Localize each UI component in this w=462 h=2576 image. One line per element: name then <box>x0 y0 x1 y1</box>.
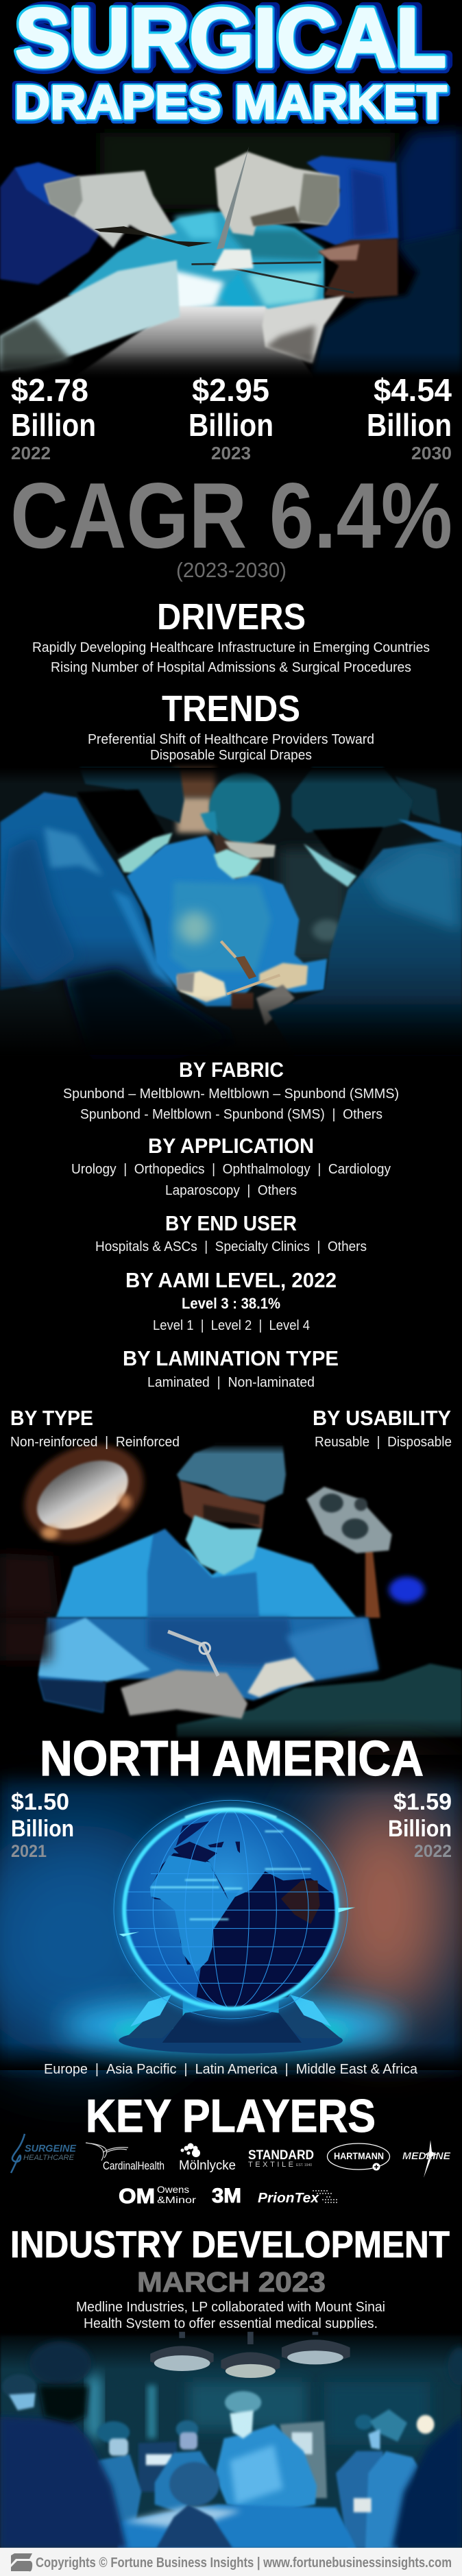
heading: North America: NORTH AMERICA <box>40 1731 424 1786</box>
logo: Cardinal Health <box>86 2143 165 2172</box>
logo: Owens and Minor: &Minor <box>157 2194 196 2205</box>
regional stat: 2021: $1.50 <box>11 1789 69 1815</box>
photo: surgical hands over drape <box>0 130 462 382</box>
CAGR callout: (2023-2030) <box>176 558 287 582</box>
trends section <box>88 688 374 763</box>
logo: Hartmann <box>328 2143 389 2170</box>
regional stat: 2022: 2022 <box>414 1842 452 1861</box>
title <box>12 0 450 131</box>
segment: by end user <box>95 1211 367 1254</box>
market stat: 2023: Billion <box>189 407 273 443</box>
trends section: Preferential Shift of Healthcare Providers Toward <box>88 732 374 747</box>
logo: PrionTex: PrionTex <box>258 2191 319 2206</box>
market stat: 2030: 2030 <box>411 443 452 463</box>
segment: by AAMI level <box>125 1268 337 1333</box>
segment: by AAMI level: Level 3 : 38.1% <box>182 1295 280 1312</box>
logo: Cardinal Health: CardinalHealth <box>103 2159 165 2172</box>
surgeon hands and drape <box>0 1618 462 1746</box>
market stat: 2023: $2.95 <box>192 372 269 408</box>
logo: Standard Textile: STANDARD <box>248 2148 314 2163</box>
globe backdrop <box>0 1755 462 2070</box>
logo: Surgeine Healthcare <box>11 2134 77 2173</box>
segment: by lamination type: Laminated | Non-laminated <box>147 1375 315 1390</box>
regional stat: 2022: Billion <box>388 1816 452 1842</box>
logo: Owens and Minor: OM <box>119 2184 155 2208</box>
drivers section <box>32 596 430 675</box>
market stat: 2022 <box>11 372 96 463</box>
logo: 3M: 3M <box>212 2185 241 2207</box>
team: right figures <box>336 2451 383 2549</box>
photo: surgeon with lamp <box>0 1425 462 1746</box>
regional stat: 2021 <box>11 1789 74 1861</box>
regional stat: 2021: Billion <box>11 1816 74 1842</box>
regions list: Europe | Asia Pacific | Latin America | Middle East & Africa <box>44 2062 418 2077</box>
equipment panel <box>365 1551 380 1618</box>
icon: glowing globe on stand <box>114 1800 355 2054</box>
market stat: 2022: Billion <box>11 407 96 443</box>
segment: by end user: BY END USER <box>165 1211 297 1235</box>
market stat: 2030: $4.54 <box>374 372 452 408</box>
heading: by type: BY TYPE <box>10 1406 93 1430</box>
gloves <box>44 171 177 248</box>
logo: Medline <box>402 2140 451 2178</box>
left surgeon head <box>80 768 184 823</box>
surgery lamp <box>0 1425 424 1618</box>
team: lead surgeon <box>215 2425 317 2514</box>
drivers section: Rapidly Developing Healthcare Infrastructure in Emerging Countries <box>32 640 430 655</box>
logo: Owens and Minor <box>119 2184 196 2208</box>
regional stat: 2021: 2021 <box>11 1842 47 1861</box>
segment: by AAMI level: BY AAMI LEVEL, 2022 <box>125 1268 337 1292</box>
market stat: 2030 <box>367 372 452 463</box>
segment: by application: Urology | Orthopedics | Ophthalmology | Cardiology <box>71 1162 391 1177</box>
logo: Standard Textile: EST. 1940 <box>296 2163 312 2167</box>
logo: Surgeine Healthcare: HEALTHCARE <box>23 2154 75 2162</box>
segment: by fabric: Spunbond - Meltblown - Spunbond (SMS) | Others <box>80 1107 382 1122</box>
segment: by application: Laparoscopy | Others <box>165 1183 297 1198</box>
heading: by usability: BY USABILITY <box>313 1406 451 1430</box>
segment: by lamination type: BY LAMINATION TYPE <box>123 1346 339 1370</box>
segment: by end user: Hospitals & ASCs | Specialty Clinics | Others <box>95 1239 367 1254</box>
heading: DRAPES MARKET: DRAPES MARKET <box>14 75 447 129</box>
belly fade <box>71 306 315 380</box>
right surgeon gown <box>268 838 462 1055</box>
drivers section: Rising Number of Hospital Admissions & Surgical Procedures <box>51 660 411 675</box>
logo: Medline: MEDLINE <box>402 2150 451 2162</box>
market stat: 2030: Billion <box>367 407 452 443</box>
segment: by fabric: BY FABRIC <box>179 1058 284 1082</box>
company logos <box>11 2134 451 2208</box>
logo: Standard Textile: TEXTILE <box>248 2161 293 2169</box>
base glow <box>60 1998 402 2053</box>
photo: operating room team <box>0 2329 462 2557</box>
logo: Surgeine Healthcare: SURGEINE <box>25 2143 77 2154</box>
logo: Molnlycke: Mölnlycke <box>179 2159 236 2173</box>
segment: by application <box>71 1134 391 1198</box>
heading: by usability: Reusable | Disposable <box>315 1435 452 1450</box>
center surgeon gown <box>127 836 327 1006</box>
heading: by usability <box>313 1406 452 1450</box>
segment: by application: BY APPLICATION <box>148 1134 314 1158</box>
regional stat: 2022: $1.59 <box>393 1789 452 1815</box>
heading: DRAPES MARKET: DRAPES MARKET <box>12 74 445 127</box>
heading: DRAPES MARKET: DRAPES MARKET <box>15 77 448 131</box>
logo: Molnlycke <box>179 2143 236 2173</box>
surgeon upper body <box>56 1444 356 1618</box>
market stat: 2023: 2023 <box>211 443 251 463</box>
heading: by type: Non-reinforced | Reinforced <box>10 1435 180 1450</box>
market stat: 2022: $2.78 <box>11 372 88 408</box>
right surgeon head <box>395 776 441 825</box>
left surgeon gown <box>0 792 236 1055</box>
development date: MARCH 2023 <box>137 2266 326 2298</box>
segment: by fabric: Spunbond – Meltblown- Meltblown – Spunbond (SMMS) <box>63 1086 399 1102</box>
regional stat: 2022 <box>388 1789 452 1861</box>
segment: by lamination type <box>123 1346 339 1390</box>
photo: surgical team of three <box>0 768 462 1055</box>
logo: Hartmann: HARTMANN <box>334 2151 384 2161</box>
heading: key players: KEY PLAYERS <box>86 2090 376 2142</box>
footer bar <box>0 2548 462 2576</box>
team: left figures <box>95 2454 141 2523</box>
stand <box>119 1995 343 2054</box>
market stat: 2023 <box>189 372 273 463</box>
table with drape <box>118 2505 356 2549</box>
gloves and instrument <box>177 971 227 1002</box>
development description: Health System to offer essential medical supplies. <box>84 2316 378 2331</box>
heading: DRAPES MARKET: DRAPES MARKET <box>14 75 447 129</box>
market stat: 2022: 2022 <box>11 443 51 463</box>
development description <box>76 2300 385 2331</box>
icon: Fortune Business Insights logo <box>11 2553 32 2571</box>
equipment <box>138 2442 177 2492</box>
foreground figures <box>156 2505 233 2549</box>
center surgeon head <box>212 833 265 879</box>
trends section: TRENDS <box>162 688 300 729</box>
drivers section: DRIVERS <box>157 596 306 637</box>
segment: by AAMI level: Level 1 | Level 2 | Level 4 <box>153 1318 310 1333</box>
development description: Medline Industries, LP collaborated with Mount Sinai <box>76 2300 385 2315</box>
logo: Owens and Minor: Owens <box>157 2184 189 2195</box>
sphere <box>114 1800 355 2019</box>
segment: by fabric <box>63 1058 399 1122</box>
ceiling lights <box>150 2332 350 2378</box>
drape <box>68 211 324 328</box>
instruments <box>217 147 249 250</box>
logo: Standard Textile <box>248 2148 314 2169</box>
trends section: Disposable Surgical Drapes <box>150 748 312 763</box>
heading: by type <box>10 1406 180 1450</box>
